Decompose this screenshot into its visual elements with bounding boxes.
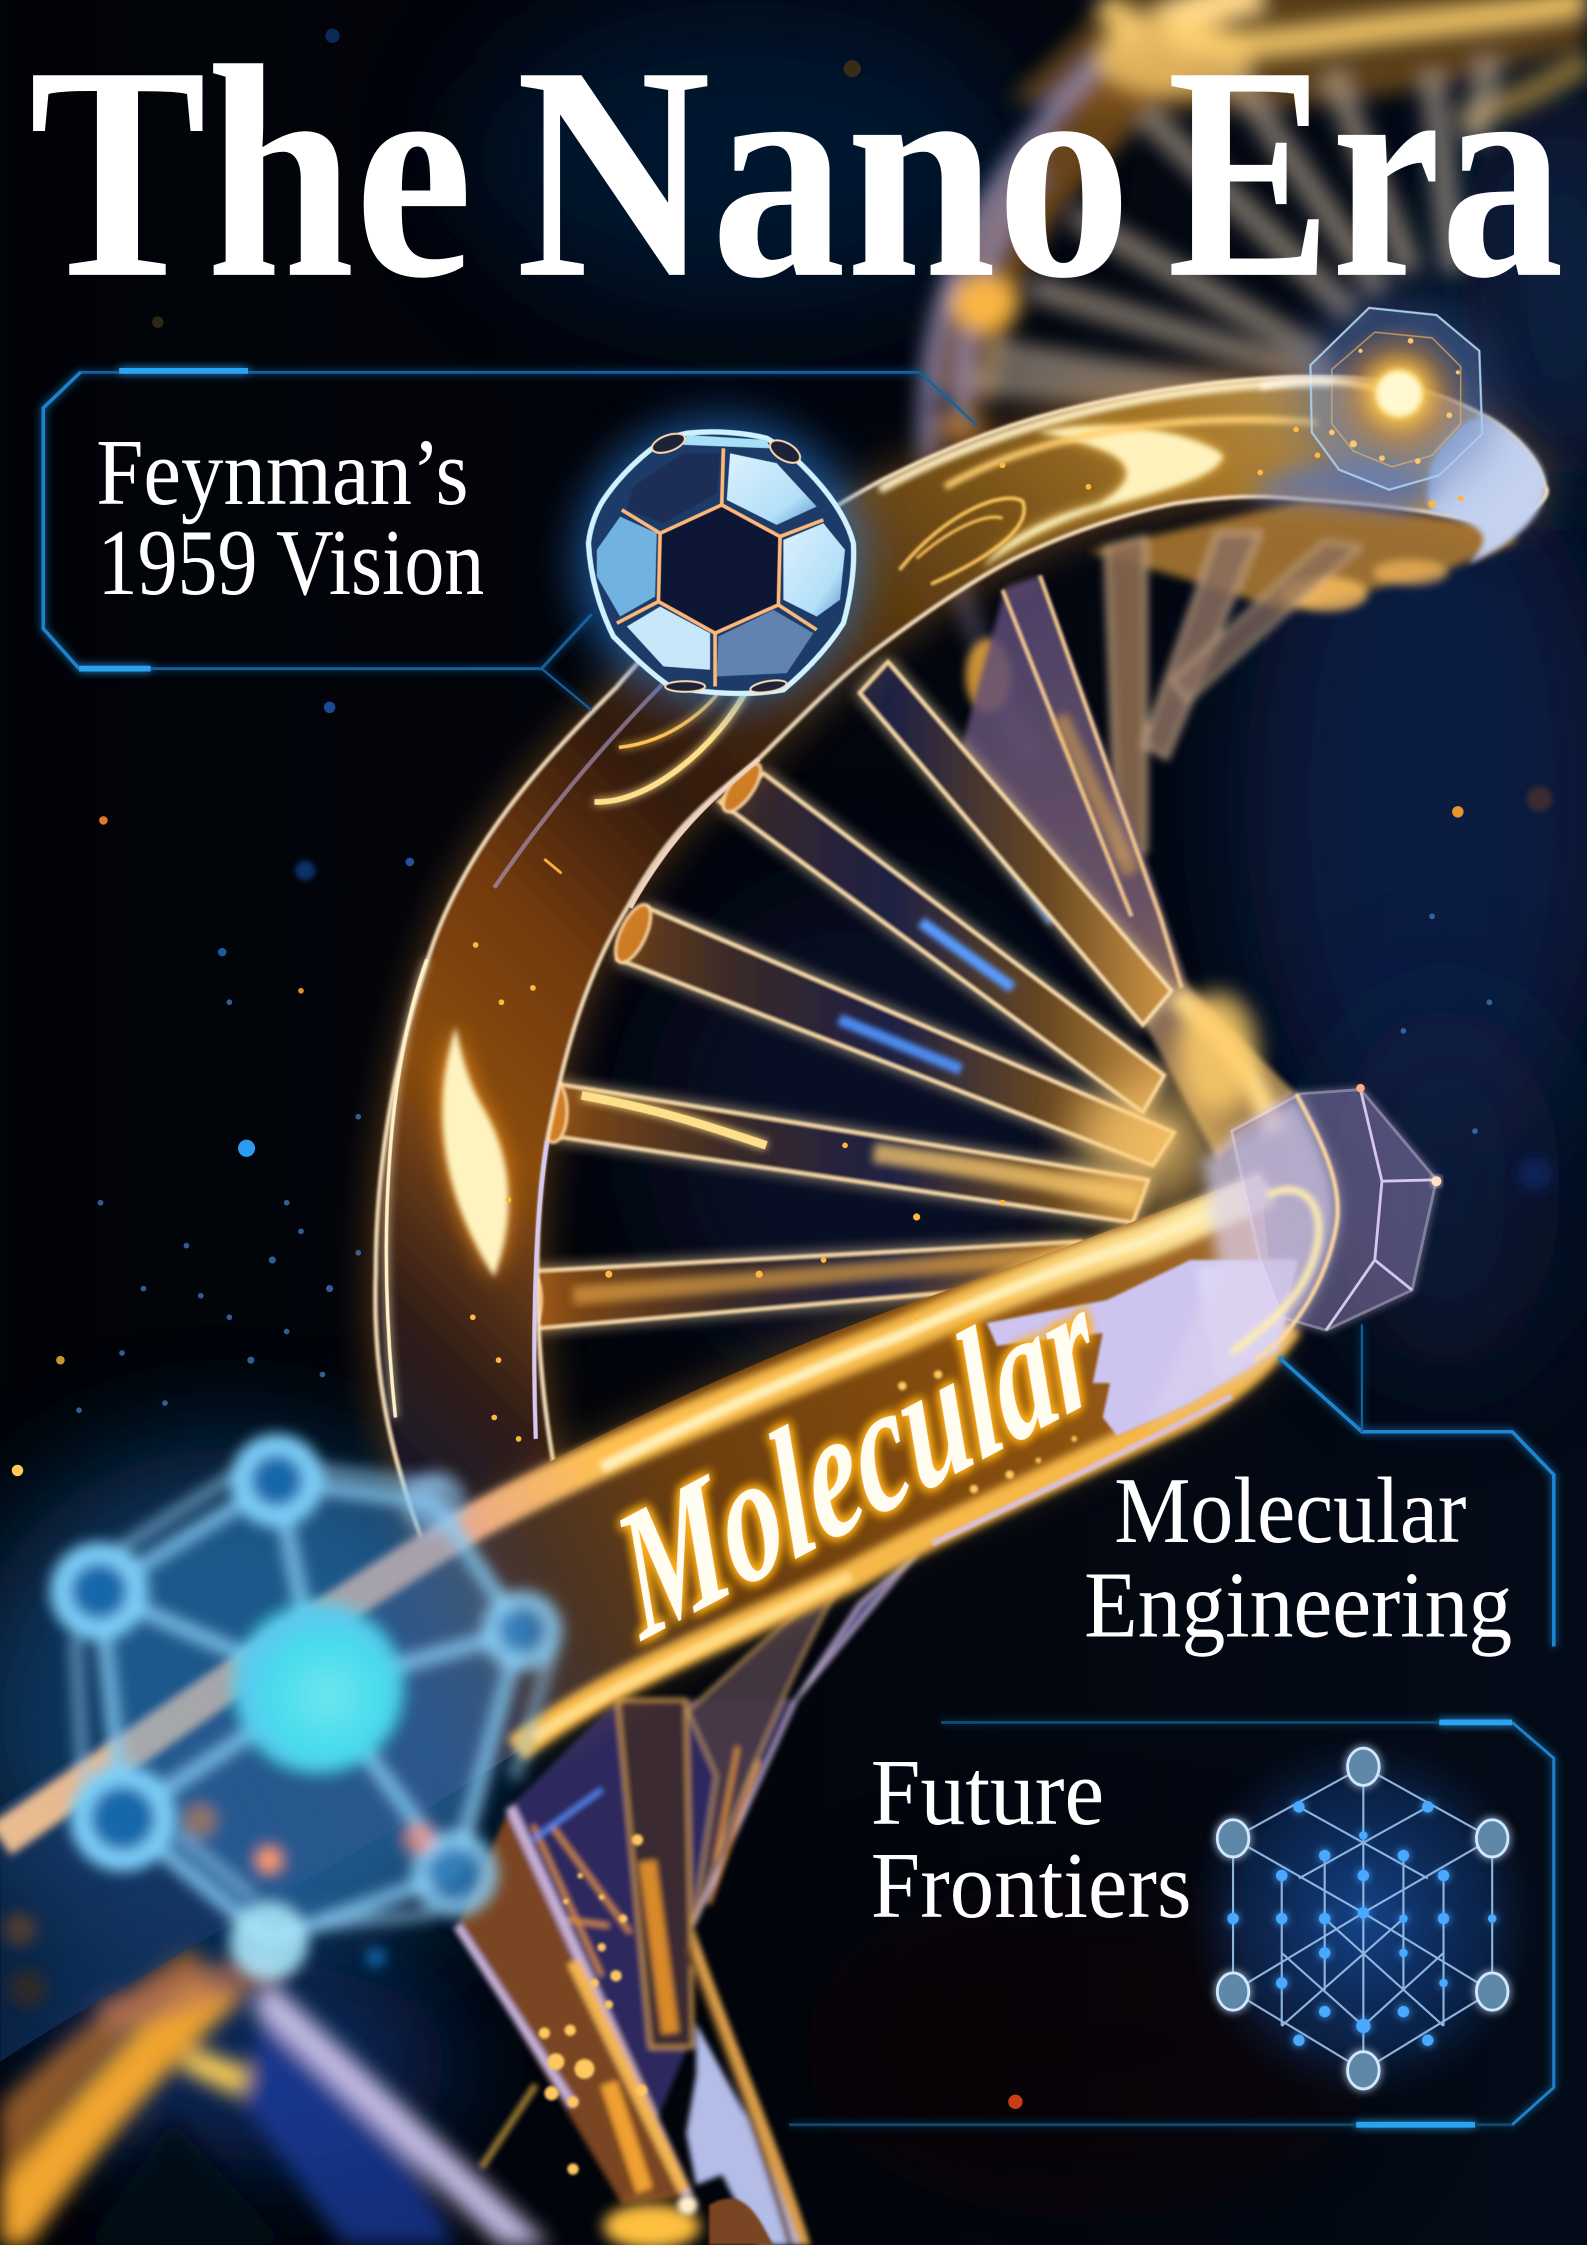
highlight swirl near sphere (899, 498, 1024, 584)
lavender end cap of strand (1427, 415, 1546, 564)
lower helix strands to bottom (0, 1553, 917, 2245)
back strand of main helix with rear rungs (961, 500, 1518, 1160)
sparkles cluster (539, 1834, 647, 2175)
strand: gold right line (693, 1926, 811, 2245)
top gold band (0, 1188, 1267, 1840)
title (29, 3, 1564, 341)
ribbon sparkles (898, 1349, 1077, 1493)
icon: blue molecule (3, 1444, 554, 2007)
callout text: Future (871, 1741, 1104, 1845)
main helix strand (375, 376, 1547, 1561)
icon: octagon node, right (1146, 1084, 1441, 1425)
blurred lower-left ribbons (0, 1947, 550, 2245)
front helix ribbon (0, 1174, 1297, 2062)
callout text: Feynman’s (96, 421, 468, 525)
strand: lavender band (686, 2023, 811, 2245)
strand: central tube (617, 1699, 693, 2047)
icon: hexagonal lattice (1184, 1732, 1542, 2105)
highlight swoosh: upper left arc (594, 680, 752, 802)
callout: Molecular Engineering (1084, 1324, 1554, 1658)
sparkles on strands (470, 427, 1464, 1442)
ribbon word: Molecular: Molecular (595, 1237, 1119, 1680)
callout text: 1959 Vision (98, 511, 484, 615)
callout text (96, 421, 484, 615)
highlight swoosh: top strand gold (984, 426, 1223, 567)
strand: diagonal brown band (457, 1807, 689, 2203)
lavender patch on ribbon (987, 1260, 1297, 1436)
background blurred DNA helix, top right (926, 0, 1587, 759)
icon: glowing octagon with sun, top right (1260, 294, 1496, 494)
facets (727, 453, 817, 525)
highlight swoosh: gold S on left strand (442, 1027, 508, 1277)
DNA rungs (513, 661, 1217, 1332)
callout: Future Frontiers (789, 1722, 1554, 2125)
callout text (871, 1741, 1192, 1938)
callout frame (1279, 1324, 1554, 1647)
translucent panel behind (510, 1699, 796, 2205)
icon: buckyball sphere (577, 418, 864, 704)
callout: Feynman's 1959 Vision (43, 371, 977, 710)
callout text: Engineering (1084, 1554, 1512, 1658)
title: The (29, 3, 473, 341)
callout text: Molecular (1114, 1459, 1466, 1563)
highlight edge: top strand (879, 383, 1330, 490)
title: Nano (516, 3, 1131, 341)
callout text (1084, 1459, 1512, 1658)
lower gold band (516, 1324, 1289, 1750)
callout text: Frontiers (871, 1834, 1192, 1938)
bright foot (603, 2203, 700, 2245)
callout frame (43, 371, 977, 710)
ribbon wrap end (1146, 1094, 1338, 1425)
callout frame (789, 1722, 1554, 2125)
